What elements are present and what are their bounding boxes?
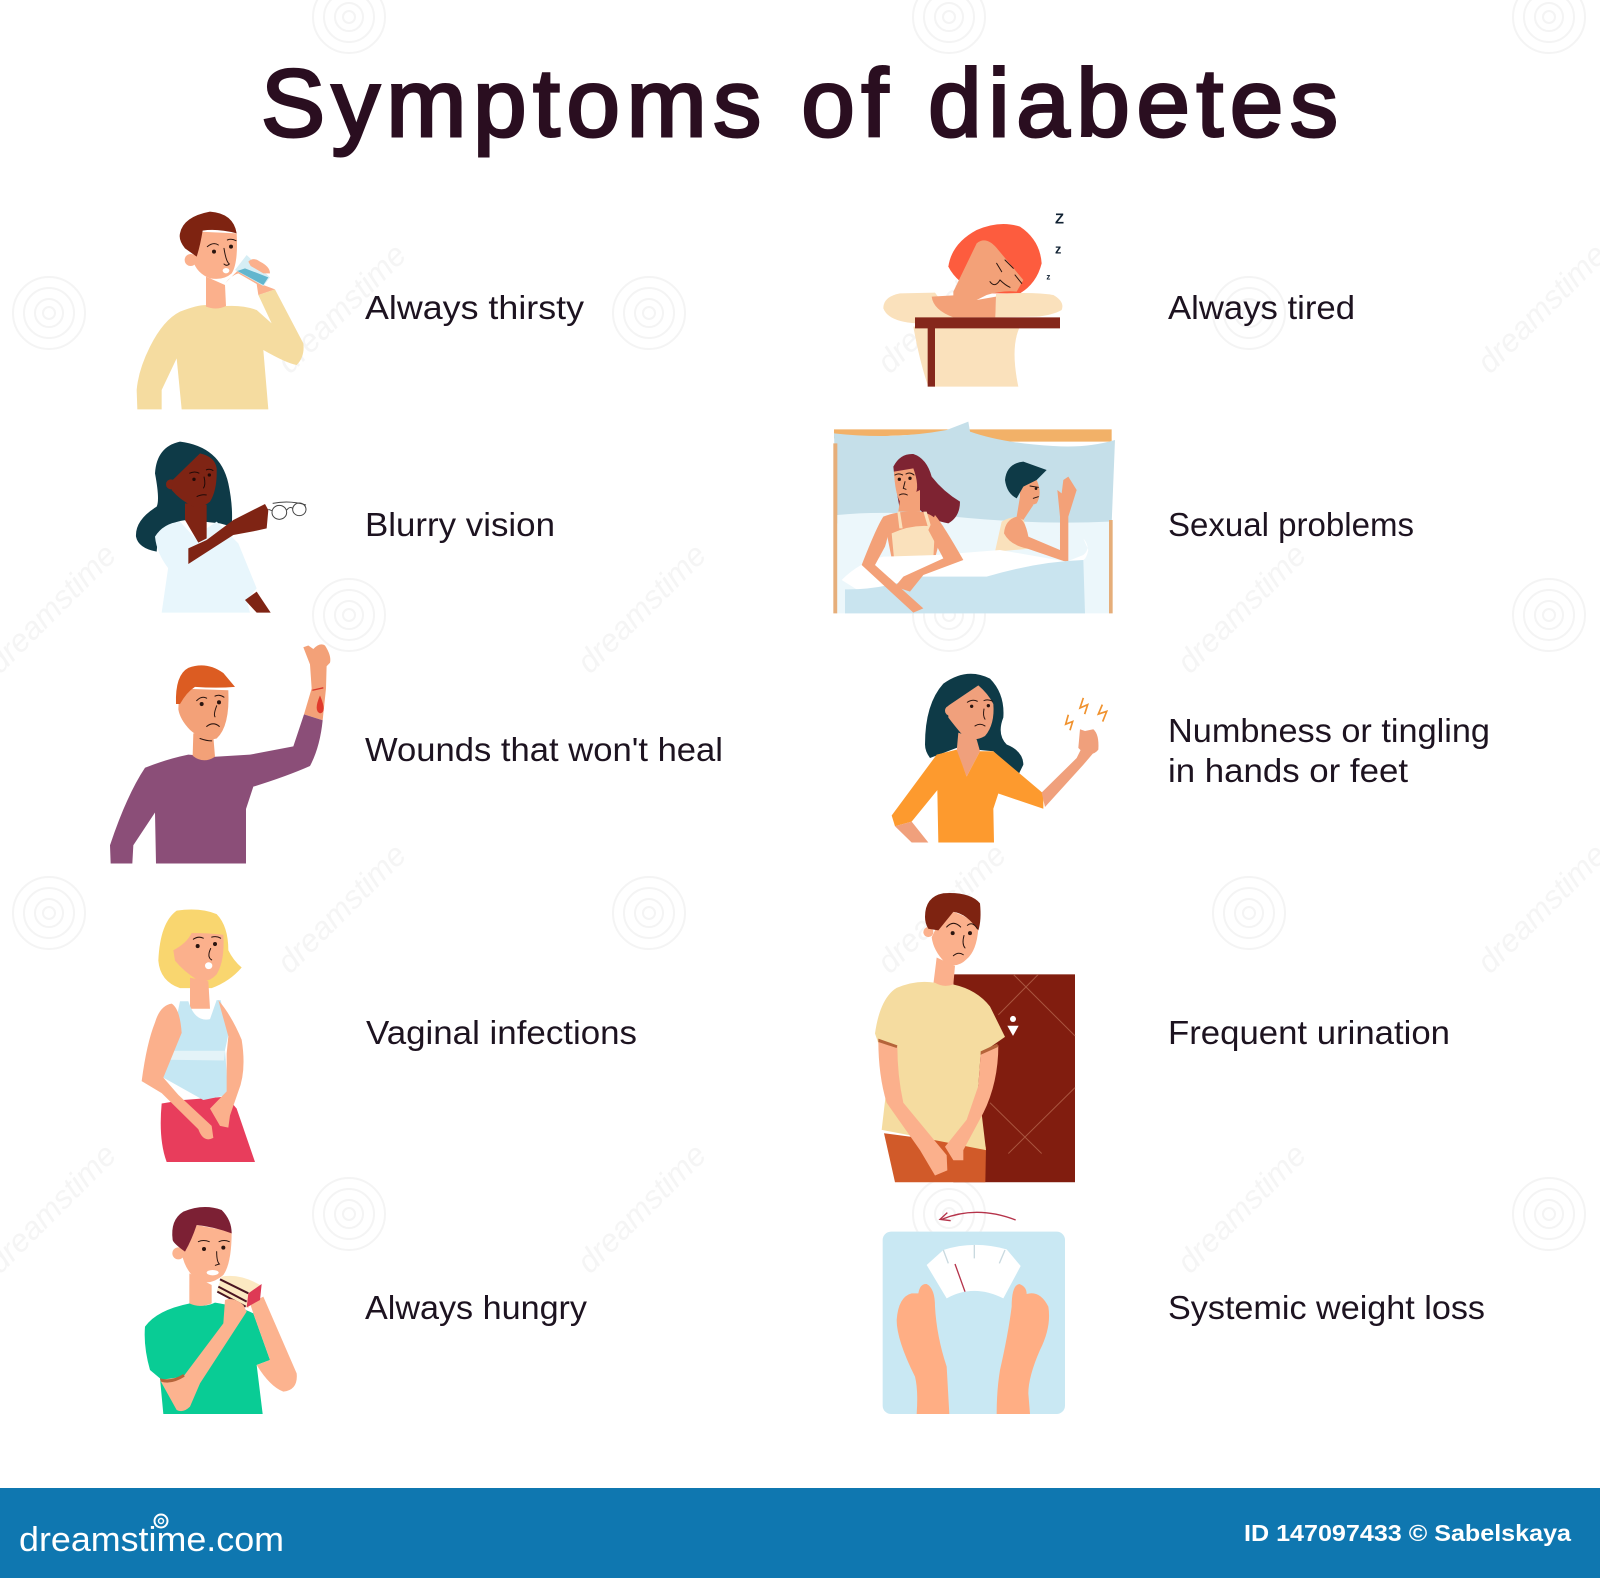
icon: man at bathroom door — [875, 893, 1075, 1182]
label: Always tired: Always tired — [1168, 289, 1355, 326]
footer band — [0, 1488, 1600, 1578]
watermark text — [0, 236, 1600, 1280]
label: Numbness or tingling: in hands or feet — [1168, 752, 1408, 789]
label: Vaginal infections: Vaginal infections — [366, 1014, 637, 1051]
watermark text: dreamstime — [1169, 1136, 1313, 1280]
icon: man drinking water — [137, 212, 304, 409]
label: Always thirsty: Always thirsty — [365, 289, 585, 326]
watermark text: dreamstime — [1169, 536, 1313, 680]
label: Systemic weight loss: Systemic weight loss — [1168, 1289, 1485, 1326]
icon: woman holding glasses — [136, 442, 306, 613]
watermark text: dreamstime — [569, 536, 713, 680]
label: Numbness or tingling: Numbness or tingling — [1168, 712, 1490, 749]
icon: couple in bed — [833, 422, 1115, 613]
label: Always hungry: Always hungry — [365, 1289, 588, 1326]
icon: woman with vaginal infection — [142, 909, 255, 1162]
icon: woman with tingling hand — [892, 674, 1107, 843]
icon: woman asleep on desk — [883, 211, 1064, 387]
label: Frequent urination: Frequent urination — [1168, 1014, 1450, 1051]
watermark text: dreamstime — [269, 836, 413, 980]
label: Numbness or tingling — [1168, 712, 1490, 789]
footer credit: ID 147097433 © Sabelskaya — [1244, 1520, 1571, 1546]
watermark text: dreamstime — [269, 236, 413, 380]
label: Blurry vision: Blurry vision — [365, 506, 555, 543]
icon: woman asleep on desk: z — [1046, 272, 1050, 281]
icon: woman asleep on desk: z — [1055, 242, 1061, 256]
icon: man with wound on arm — [110, 644, 330, 863]
label: Wounds that won't heal: Wounds that won't heal — [365, 731, 723, 768]
title: Symptoms of diabetes — [261, 50, 1338, 157]
icon: feet on scale — [883, 1212, 1065, 1414]
label: Sexual problems: Sexual problems — [1168, 506, 1414, 543]
icon: woman asleep on desk: Z — [1055, 211, 1064, 227]
icon: man eating cake — [145, 1207, 297, 1414]
watermark text: dreamstime — [569, 1136, 713, 1280]
watermark spirals — [13, 0, 1585, 1250]
watermark text: dreamstime — [869, 836, 1013, 980]
footer logo: dreamstime.com — [19, 1521, 284, 1559]
watermark text: dreamstime — [869, 236, 1013, 380]
